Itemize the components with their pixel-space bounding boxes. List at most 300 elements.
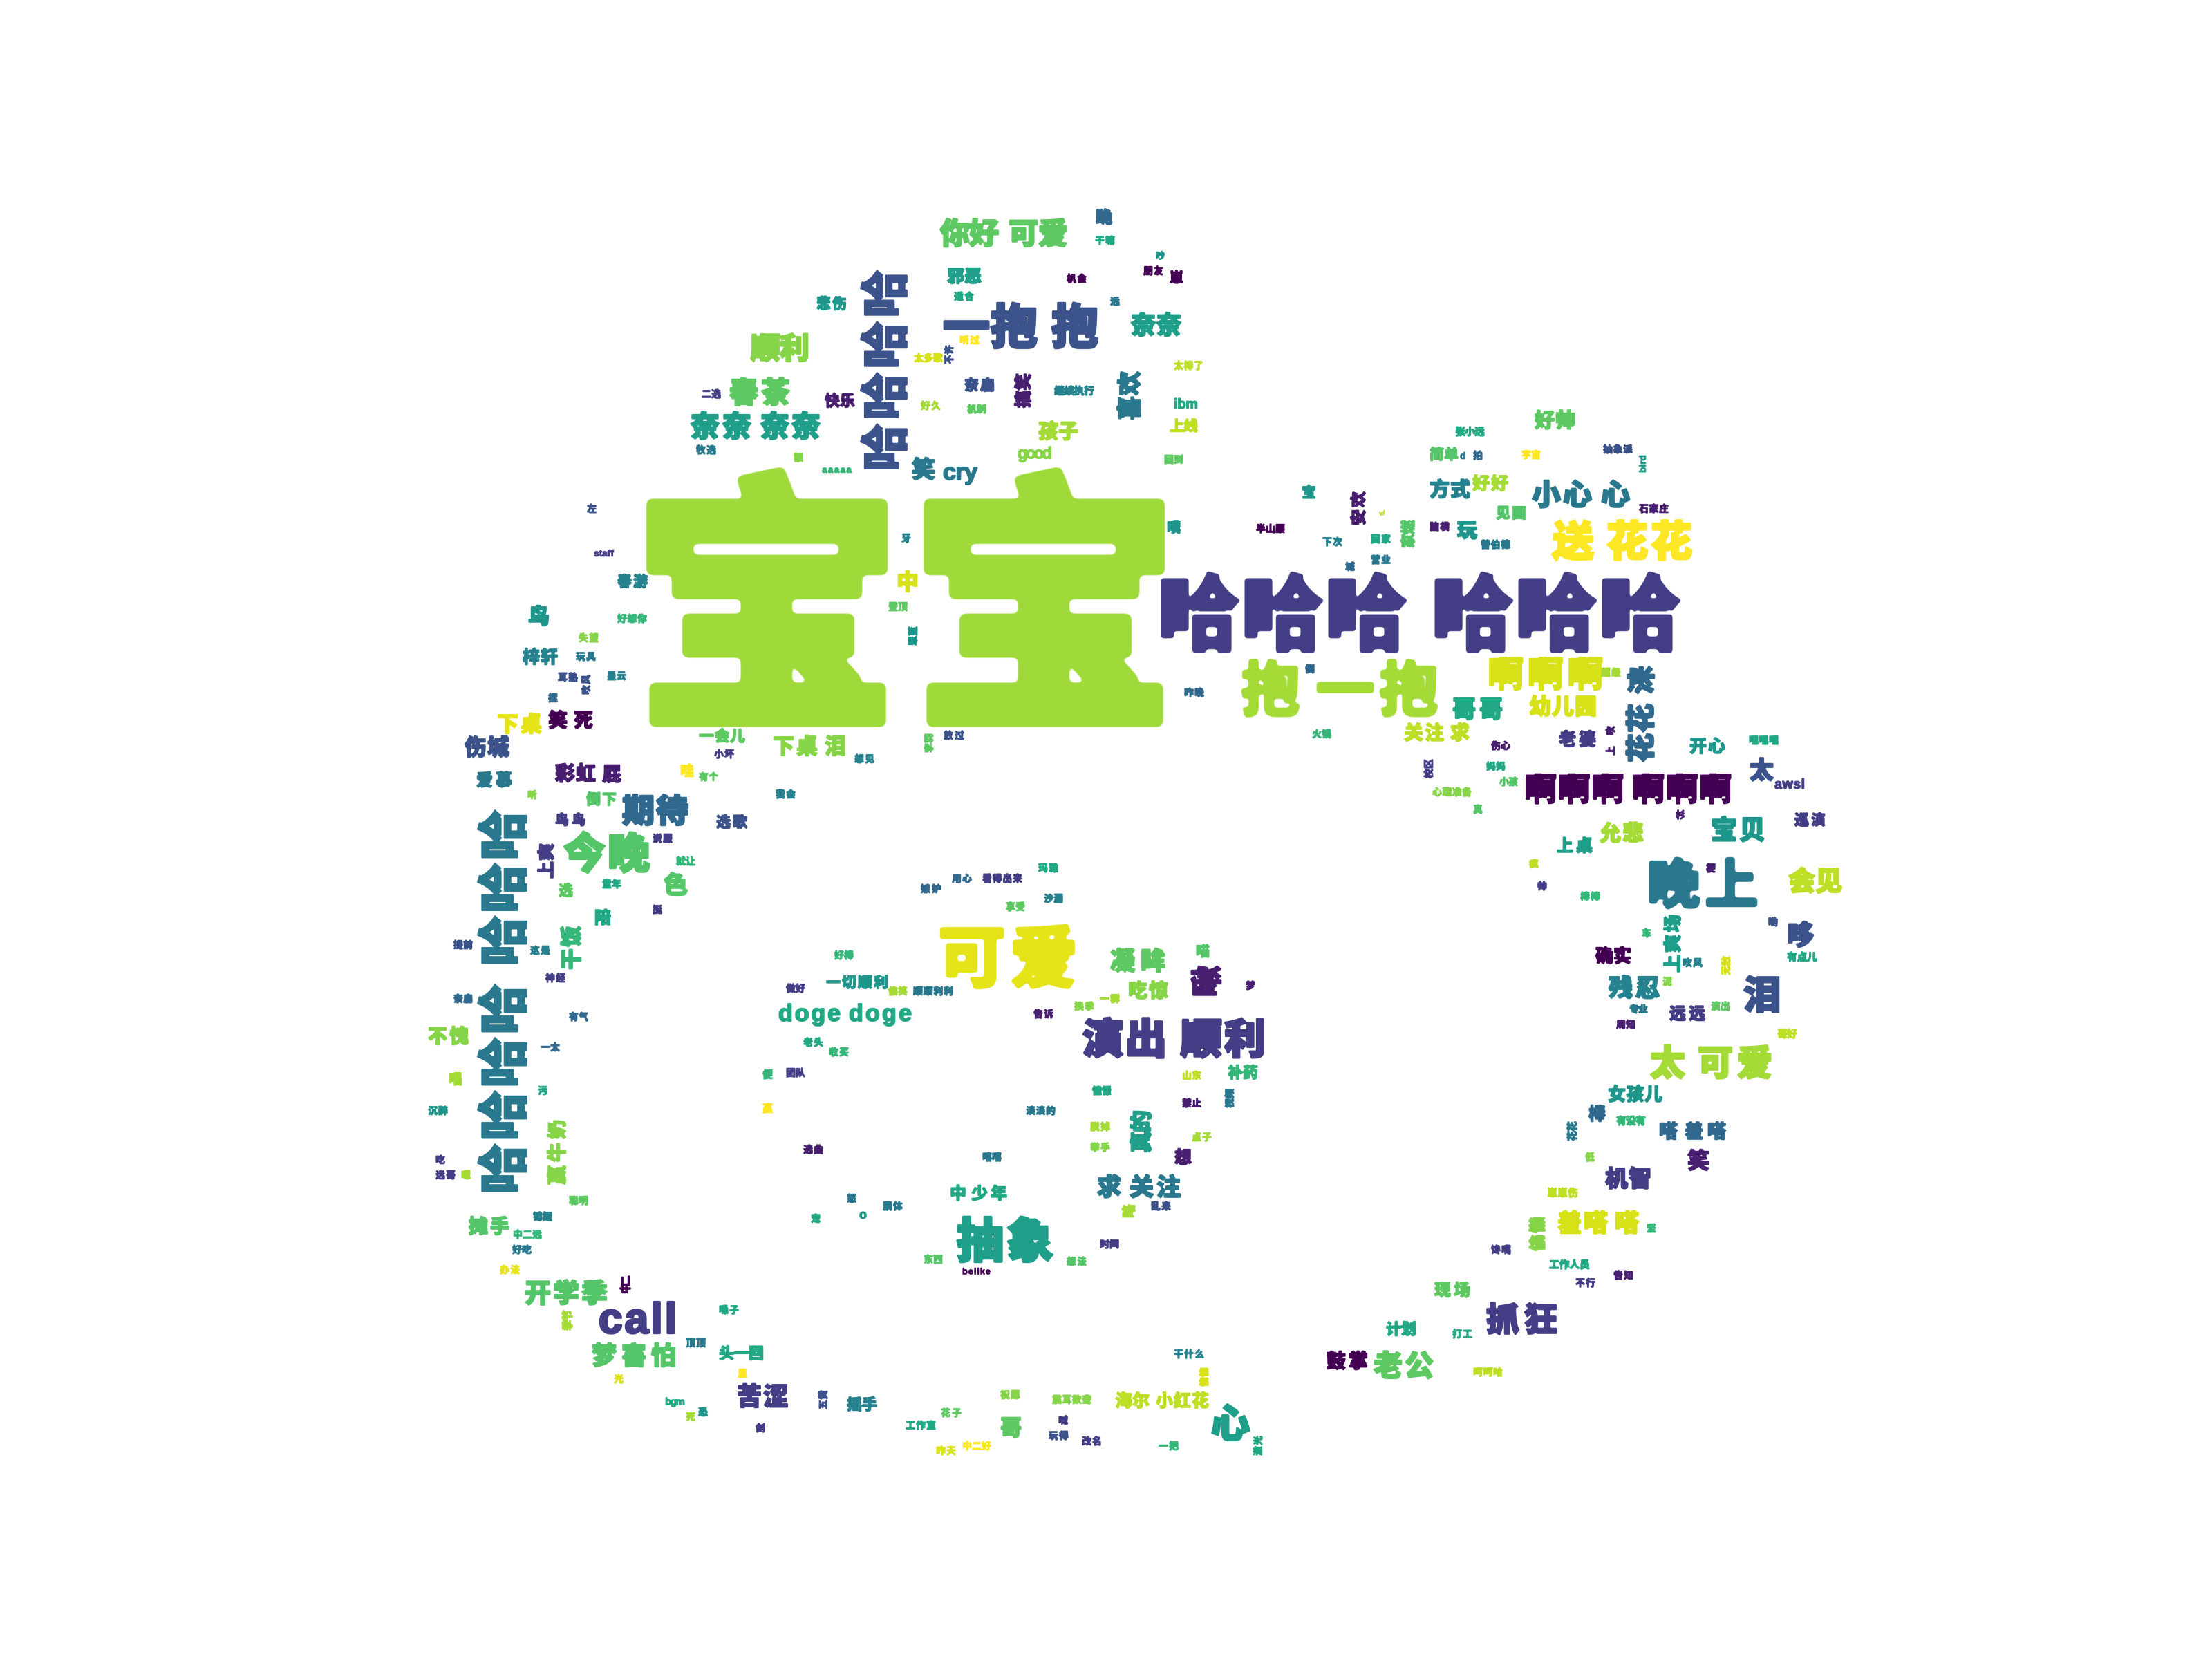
words: upper arc: 适合	[954, 291, 974, 302]
word: 宝宝 (largest): 宝	[632, 461, 902, 762]
words: bottom arc: 祝愿	[1000, 1389, 1020, 1400]
words: left side: 唱	[449, 1071, 462, 1087]
word: 抱 一抱: 一抱	[1315, 657, 1438, 724]
words: upper arc: 抱	[1051, 301, 1098, 354]
words: inner ring: 点子	[1192, 1132, 1212, 1143]
words: left side: 选歌	[716, 814, 748, 831]
words: right side: 哆	[1787, 921, 1814, 951]
words: upper right: 花花	[1624, 704, 1658, 762]
words: left side: 春游	[617, 574, 648, 590]
words: right side: 真	[1473, 804, 1483, 815]
words: right side: awsl	[1774, 777, 1805, 792]
words: right side: 太	[1650, 1044, 1685, 1082]
words: right side: 哥好	[1777, 1029, 1797, 1040]
word: 抱 一抱	[1241, 657, 1438, 724]
words: right side: 演出	[1711, 1001, 1730, 1012]
words: left side: 办法	[500, 1264, 520, 1275]
words: inner ring: 做好	[786, 983, 805, 994]
words: bottom arc: 喊	[1058, 1415, 1068, 1426]
words: upper right: 涞	[1626, 666, 1658, 694]
words: upper arc: 你好	[940, 218, 999, 251]
words: right side: 疯	[1529, 859, 1539, 870]
words: right side: 嗒	[1659, 1121, 1678, 1142]
words: upper right: 抽象派	[1603, 444, 1633, 455]
word: 啊啊啊: 啊啊啊	[1488, 655, 1603, 695]
words: inner ring: 视频	[1224, 1089, 1235, 1108]
words: right side: 车	[1642, 928, 1651, 939]
words: bottom arc: 玩得	[1049, 1430, 1069, 1441]
words: upper arc: 邪恶	[947, 267, 982, 286]
words: bottom arc	[592, 1295, 1264, 1456]
words: left side: 一太	[541, 1042, 560, 1053]
words: left side: 听	[527, 789, 537, 800]
words: bottom arc: 海尔	[1115, 1391, 1150, 1411]
words: inner ring: 淡淡的	[1026, 1105, 1056, 1116]
words: left side: 摊手	[469, 1215, 509, 1237]
words: left side: 说服	[653, 833, 673, 844]
words: inner ring: 关注	[1130, 1174, 1181, 1201]
words: right side: 泥	[1662, 976, 1672, 987]
word: 抽象: 抽象	[957, 1215, 1053, 1268]
words: upper right: 宝	[1302, 484, 1316, 500]
words: right side: 专业	[1629, 1004, 1648, 1015]
words: right side: 不行	[1575, 1277, 1595, 1288]
words: bottom arc: 哥	[1000, 1416, 1022, 1441]
words: upper arc: 机会	[1067, 273, 1087, 284]
words: left side: 有气	[569, 1011, 588, 1022]
words: left side: 彩虹	[555, 762, 596, 785]
words: inner ring: 梦	[1246, 980, 1255, 991]
words: centre and gaps: 李羽	[924, 733, 935, 753]
words: centre and gaps: 放过	[944, 730, 964, 741]
words: left side	[428, 503, 748, 1385]
words: upper arc: 悲伤	[816, 296, 847, 312]
words: upper right: 幼儿园	[1529, 694, 1597, 719]
words: inner ring: 看得出来	[982, 873, 1022, 884]
words: upper arc: 春茶	[729, 376, 790, 409]
words: left side: 好想你	[617, 613, 647, 624]
words: bottom arc: 顶顶	[686, 1338, 706, 1349]
words: left side: 选	[559, 883, 573, 899]
words: left side: 远哥	[435, 1170, 456, 1181]
words: left side: 童年	[602, 879, 621, 890]
words: bottom right	[1327, 1282, 1557, 1382]
words: left side: staff	[594, 547, 614, 559]
words: inner ring: 真的	[1129, 1110, 1154, 1153]
words: inner ring: doge	[849, 1000, 912, 1027]
words: right side: 棒	[1588, 1105, 1606, 1124]
word: 哈哈哈 哈哈哈: 哈哈哈	[1157, 569, 1407, 662]
words: bottom arc: 中二好	[962, 1441, 991, 1452]
words: upper right: 火锅	[1312, 729, 1331, 740]
words: bottom right: 呵呵哈	[1473, 1367, 1503, 1378]
all remaining words	[428, 207, 1842, 1456]
words: upper arc: 崽	[1170, 270, 1183, 285]
words: bottom arc: 一把	[1159, 1441, 1179, 1452]
words: upper right: 好帅	[1535, 409, 1575, 432]
words: upper arc: 听过	[959, 335, 980, 346]
words: right side: 笑	[1687, 1148, 1709, 1173]
words: left side: 哇	[680, 763, 694, 779]
words: right side: 工作人员	[1549, 1259, 1590, 1271]
words: bottom arc: 梦害怕	[592, 1341, 676, 1370]
words: upper arc: 跪	[1096, 207, 1112, 227]
words: inner ring: 嫉妒	[921, 883, 941, 894]
words: upper arc: 额	[794, 452, 803, 463]
words: inner ring: 山东	[1182, 1070, 1201, 1081]
words: bottom arc: 嗓子	[719, 1304, 739, 1315]
word: 哈哈哈哈 top stack: 哈哈哈哈	[859, 270, 912, 471]
words: upper right: 回家	[1371, 534, 1391, 545]
words: left side: 嗯	[461, 1170, 471, 1181]
words: bottom arc: 工作室	[906, 1420, 936, 1431]
words: left side: 小坏	[714, 749, 734, 760]
words: left side: 干饭	[560, 926, 583, 970]
word: 送 花花: 花花	[1606, 518, 1692, 565]
words: right side: 花花	[1566, 1121, 1579, 1141]
words: right side: 小孩	[1499, 776, 1518, 787]
words: left side: 鸟鸟	[555, 812, 585, 828]
words: right side: 吹风	[1683, 957, 1703, 968]
words: upper right: 简单	[1430, 447, 1459, 463]
words: inner ring: 东西	[924, 1254, 943, 1265]
words: upper arc: 继续执行	[1054, 384, 1094, 397]
words: left side: 挺	[653, 904, 662, 915]
words: inner ring: 举手	[1090, 1142, 1110, 1153]
words: inner ring: 一群	[1100, 993, 1120, 1004]
words: inner ring: 想	[1174, 1148, 1192, 1168]
words: inner ring: 好棒	[834, 950, 854, 961]
words: left side: 开学季	[525, 1280, 608, 1309]
words: bottom arc: 苦涩	[737, 1382, 788, 1410]
words: inner ring: 赢	[762, 1102, 773, 1114]
words: right side: 女孩儿	[1608, 1084, 1662, 1105]
words: bottom arc: 摇手	[847, 1396, 877, 1413]
words: right side: 馋嘴	[1491, 1244, 1511, 1255]
words: upper arc: 喜欢	[1117, 371, 1143, 420]
words: upper arc: 可爱	[1009, 218, 1068, 251]
words: upper right: bird	[1637, 455, 1648, 473]
words: bottom right: 老公	[1374, 1349, 1434, 1382]
words: right side: 泪	[1743, 974, 1781, 1017]
words: upper arc: 奈奈	[1131, 311, 1181, 339]
words: right side: 可爱	[1698, 1044, 1772, 1082]
words: right side: 上桌	[1557, 836, 1593, 856]
words: upper right: 开心	[1689, 737, 1725, 756]
words: centre and gaps: 想见	[854, 753, 874, 765]
words: inner ring: 少年	[971, 1185, 1007, 1203]
words: upper right: 伤心	[1491, 740, 1510, 751]
words: upper right: 城	[1345, 561, 1355, 572]
words: inner ring: 用心	[952, 873, 972, 884]
words: left side: 光	[614, 1374, 624, 1385]
words: bottom arc: 偷偷	[1199, 1367, 1210, 1387]
word: 啊啊啊 啊啊啊: 啊啊啊	[1524, 771, 1624, 807]
words: inner ring: o	[859, 1208, 867, 1221]
words: left side: 捏	[548, 693, 558, 704]
words: left side: 中二	[619, 1275, 632, 1294]
words: upper right: 好好	[1472, 474, 1508, 494]
words: upper right: 替伯德	[1481, 539, 1510, 550]
words: bottom arc: 头一回	[719, 1345, 764, 1362]
words: upper arc: 吵	[1156, 250, 1165, 261]
words: left side: 鸟	[528, 604, 550, 629]
words: upper arc: 太多歌	[914, 353, 944, 364]
words: left side: 好吃	[512, 1244, 532, 1255]
words: upper arc: 一抱	[943, 301, 1038, 354]
words: upper right: 老婆	[1559, 730, 1596, 749]
words: upper arc: 好久	[921, 400, 941, 411]
word: 哈哈哈 left stack: 哈哈哈	[476, 809, 532, 966]
words: left side: 聪明	[569, 1195, 588, 1206]
words: right side: 确实	[1595, 946, 1631, 966]
words: upper right: 半山腰	[1256, 523, 1285, 534]
words: bottom arc: 花子	[941, 1407, 962, 1418]
word: 演出 顺利: 顺利	[1181, 1016, 1266, 1063]
words: bottom arc: 恐	[698, 1407, 708, 1418]
words: bottom arc: 里	[738, 1368, 747, 1379]
words: bottom arc: call	[599, 1295, 677, 1342]
words: left side: 屁	[602, 763, 621, 785]
words: left side: 陪	[594, 908, 611, 928]
words: right side: 妈妈	[1486, 761, 1506, 772]
words: upper right: 嘿嘿嘿	[1749, 735, 1779, 746]
words: left side: 耳熟	[558, 672, 578, 683]
words: right side: 羞嗒	[1685, 1121, 1726, 1142]
words: centre and gaps: 泪	[825, 734, 846, 759]
words: upper right: 玩	[1457, 520, 1477, 542]
words: upper right: v/	[1379, 510, 1385, 517]
words: inner ring: 团队	[786, 1067, 805, 1078]
words: left side: 有个	[699, 771, 718, 782]
words: right side: 帅	[1537, 881, 1547, 892]
words: inner ring: 禁止	[1182, 1098, 1201, 1109]
words: inner ring: 中	[950, 1185, 966, 1203]
words: bottom arc: 改名	[1082, 1436, 1102, 1447]
words: upper right: 张小远	[1455, 426, 1485, 438]
words: right side: 太	[1750, 758, 1774, 784]
words: inner ring: 吃惊	[1128, 980, 1168, 1001]
words: right side: 杉	[1676, 809, 1685, 821]
words: upper right: 石家庄	[1639, 503, 1669, 514]
words: upper right: 心	[1601, 478, 1630, 512]
words: left side: 失望	[579, 632, 599, 644]
word: 哈哈哈 哈哈哈	[1157, 569, 1681, 662]
words: upper right: 倒	[1305, 664, 1315, 675]
words: left side: 倒下	[586, 792, 617, 807]
word: 演出 顺利	[1082, 1016, 1266, 1063]
words: right side: 巡演	[1794, 812, 1826, 828]
words: left side: 提前	[453, 939, 473, 950]
words: upper arc: 上线	[1170, 419, 1198, 434]
words: upper arc: 干嘛	[1095, 235, 1115, 246]
words: bottom arc: 昨天	[936, 1445, 956, 1456]
words: left side: 伤城	[465, 735, 509, 760]
words: upper arc: 奈奈	[691, 411, 751, 442]
words: inner ring: 胴体	[883, 1201, 903, 1212]
words: upper right: 营业	[1371, 554, 1391, 565]
words: upper right: 哥哥	[1452, 697, 1503, 723]
words: right side: 告知	[1613, 1270, 1633, 1281]
words: right side: 低	[1585, 1152, 1595, 1163]
words: inner ring: 偷笑	[888, 986, 908, 997]
words: upper right: 家燃	[1400, 520, 1417, 548]
words: upper right: 方式	[1430, 478, 1470, 501]
words: upper arc: 孩子	[1038, 420, 1078, 443]
words: upper right: 下次	[1322, 536, 1342, 547]
words: right side: 无敌	[1721, 956, 1732, 975]
words: upper arc: 机制	[967, 404, 986, 415]
words: upper right: 见面	[1496, 506, 1526, 521]
words: inner ring	[762, 863, 1258, 1276]
words: right side: 残忍	[1609, 975, 1660, 1002]
words: inner ring: 补药	[1228, 1065, 1258, 1081]
words: left side: 爱慕	[476, 771, 512, 789]
words: upper arc: ibm	[1174, 397, 1198, 412]
word: 宝宝 (largest): 宝	[910, 461, 1179, 762]
words: bottom arc: 小红花	[1156, 1391, 1209, 1411]
words: right side: 梗	[1706, 863, 1716, 874]
words: upper arc: 笑	[912, 457, 935, 483]
words: upper right: d	[1460, 450, 1466, 461]
words: bottom arc: 剑	[756, 1423, 765, 1434]
words: left side: 神经	[545, 973, 565, 984]
words: inner ring: doge	[778, 1000, 841, 1027]
words: right side: 哟	[1768, 917, 1778, 928]
words: inner ring: 想法	[1067, 1256, 1087, 1267]
word: 宝宝 (largest)	[632, 461, 1179, 762]
words: right side: 坚	[1647, 1223, 1656, 1234]
words: right side: 会见	[1788, 867, 1842, 897]
words: right side: 有点儿	[1787, 951, 1817, 964]
word: 晚上: 晚上	[1647, 854, 1759, 915]
words: upper right: 脑袋	[1430, 521, 1450, 532]
words: bottom arc: 激光	[1253, 1436, 1264, 1456]
word: 哈哈哈哈 left lower stack: 哈哈哈哈	[476, 984, 532, 1194]
words: centre and gaps: 昨晚	[1184, 687, 1204, 698]
words: upper arc: 朋友	[1143, 265, 1163, 276]
words: inner ring: 憧憬	[1092, 1085, 1112, 1096]
words: centre and gaps	[773, 520, 1204, 800]
words: right side: 棒棒	[1580, 891, 1600, 902]
words: inner ring: 享受	[1006, 901, 1025, 912]
words: left side: 笑	[548, 709, 568, 731]
words: left side: 期待	[622, 792, 688, 830]
words: upper arc: 奈扁	[964, 377, 995, 394]
word: 抱 一抱: 抱	[1241, 657, 1300, 724]
words: upper right: 关注	[1404, 722, 1444, 744]
words: inner ring: 乱来	[1151, 1201, 1171, 1212]
words: right side: 校区	[1423, 759, 1434, 778]
word: 今晚: 今晚	[563, 830, 650, 877]
words: inner ring: 告诉	[1033, 1009, 1053, 1020]
words: right side: 远远	[1669, 1005, 1705, 1023]
words: left side: 污	[538, 1085, 547, 1096]
words: bottom right: 鼓掌	[1327, 1349, 1368, 1371]
words: centre and gaps: 下桌	[773, 734, 818, 759]
word: 演出 顺利: 演出	[1082, 1016, 1167, 1063]
words: left side: 这是	[530, 945, 550, 956]
words: left side: 左	[587, 503, 597, 514]
words: right side: 宝贝	[1711, 816, 1765, 845]
words: bottom arc: 心	[1211, 1402, 1250, 1446]
word: 啊啊啊 啊啊啊: 啊啊啊	[1632, 771, 1732, 807]
words: upper right	[1256, 409, 1779, 762]
words: left side: 一会儿	[699, 727, 745, 745]
words: right side: 允悲	[1600, 821, 1644, 846]
words: upper arc: 顺利	[751, 332, 809, 366]
words: upper right: 超级	[1601, 667, 1621, 678]
words: upper arc: 快乐	[825, 393, 855, 409]
words: bottom right: 打工	[1452, 1329, 1472, 1340]
words: right side: 机智	[1605, 1165, 1651, 1192]
words: bottom right: 计划	[1386, 1320, 1416, 1338]
words: bottom arc: 干什么	[1174, 1349, 1204, 1360]
words: bottom right: 抓狂	[1486, 1302, 1557, 1338]
words: right side: 偷懒	[1528, 1217, 1547, 1251]
words: left side: 沉醉	[428, 1105, 448, 1116]
words: upper arc: 不许	[944, 345, 955, 364]
words: inner ring: 喵	[1196, 944, 1210, 959]
words: left side: 就让	[676, 856, 695, 867]
words: inner ring: 脱掉	[1090, 1121, 1110, 1132]
words: upper arc: 奈奈	[760, 411, 821, 442]
words: upper arc: 牧选	[696, 444, 716, 456]
words: left side: 中二远	[513, 1229, 542, 1240]
words: upper right: 上吹	[1605, 726, 1616, 756]
words: inner ring: 老头	[803, 1037, 823, 1048]
word: 送 花花: 送	[1552, 518, 1594, 565]
words: upper arc: aaaaa	[822, 464, 852, 475]
words: inner ring: 求	[1097, 1174, 1121, 1201]
words: right side: 心理准备	[1432, 787, 1472, 798]
words: bottom arc: 震耳欲聋	[1052, 1394, 1091, 1405]
words: inner ring: 便	[762, 1069, 773, 1081]
words: inner ring: 略	[1121, 1204, 1137, 1218]
words: inner ring: 顺顺利利	[913, 986, 953, 997]
words: right side: 羞嗒	[1557, 1210, 1608, 1237]
words: bottom arc: bgm	[665, 1396, 685, 1407]
words: inner ring: 换季	[1074, 1001, 1094, 1012]
words: left side: 玩具	[576, 651, 596, 662]
words: right side: 嗒	[1615, 1210, 1639, 1237]
words: centre and gaps: 我会	[776, 789, 796, 800]
words: inner ring: belike	[962, 1266, 991, 1276]
words: upper right: 求	[1450, 722, 1470, 744]
words: upper right: 小心	[1532, 478, 1592, 512]
words: left side: 吹风	[581, 675, 592, 695]
word: 可爱: 可爱	[938, 920, 1078, 996]
words: upper arc	[691, 207, 1203, 485]
words: upper arc: 搞笑	[1014, 373, 1033, 408]
words: upper arc: 太棒了	[1174, 360, 1203, 371]
words: left side: 奈扁	[453, 993, 473, 1004]
words: left side: 不愧	[428, 1026, 469, 1047]
words: left side: 锦鲤	[533, 1211, 552, 1222]
words: right side: 崽崽伤	[1547, 1186, 1578, 1199]
words: right side: 上爽场	[1662, 915, 1683, 973]
words: centre and gaps: 噗	[1167, 520, 1181, 536]
words: left side: 赢牛奶	[546, 1120, 568, 1185]
words: centre and gaps: 中	[897, 570, 919, 594]
words: inner ring: 怒	[847, 1193, 856, 1204]
words: upper arc: 远	[1110, 296, 1120, 307]
word: 送 花花	[1552, 518, 1692, 565]
words: centre and gaps: 翠蓝	[908, 626, 919, 646]
words: inner ring: 一切顺利	[826, 975, 888, 991]
words: inner ring: 玛雅	[1038, 863, 1058, 874]
words: inner ring: 凝眸	[1110, 947, 1165, 975]
